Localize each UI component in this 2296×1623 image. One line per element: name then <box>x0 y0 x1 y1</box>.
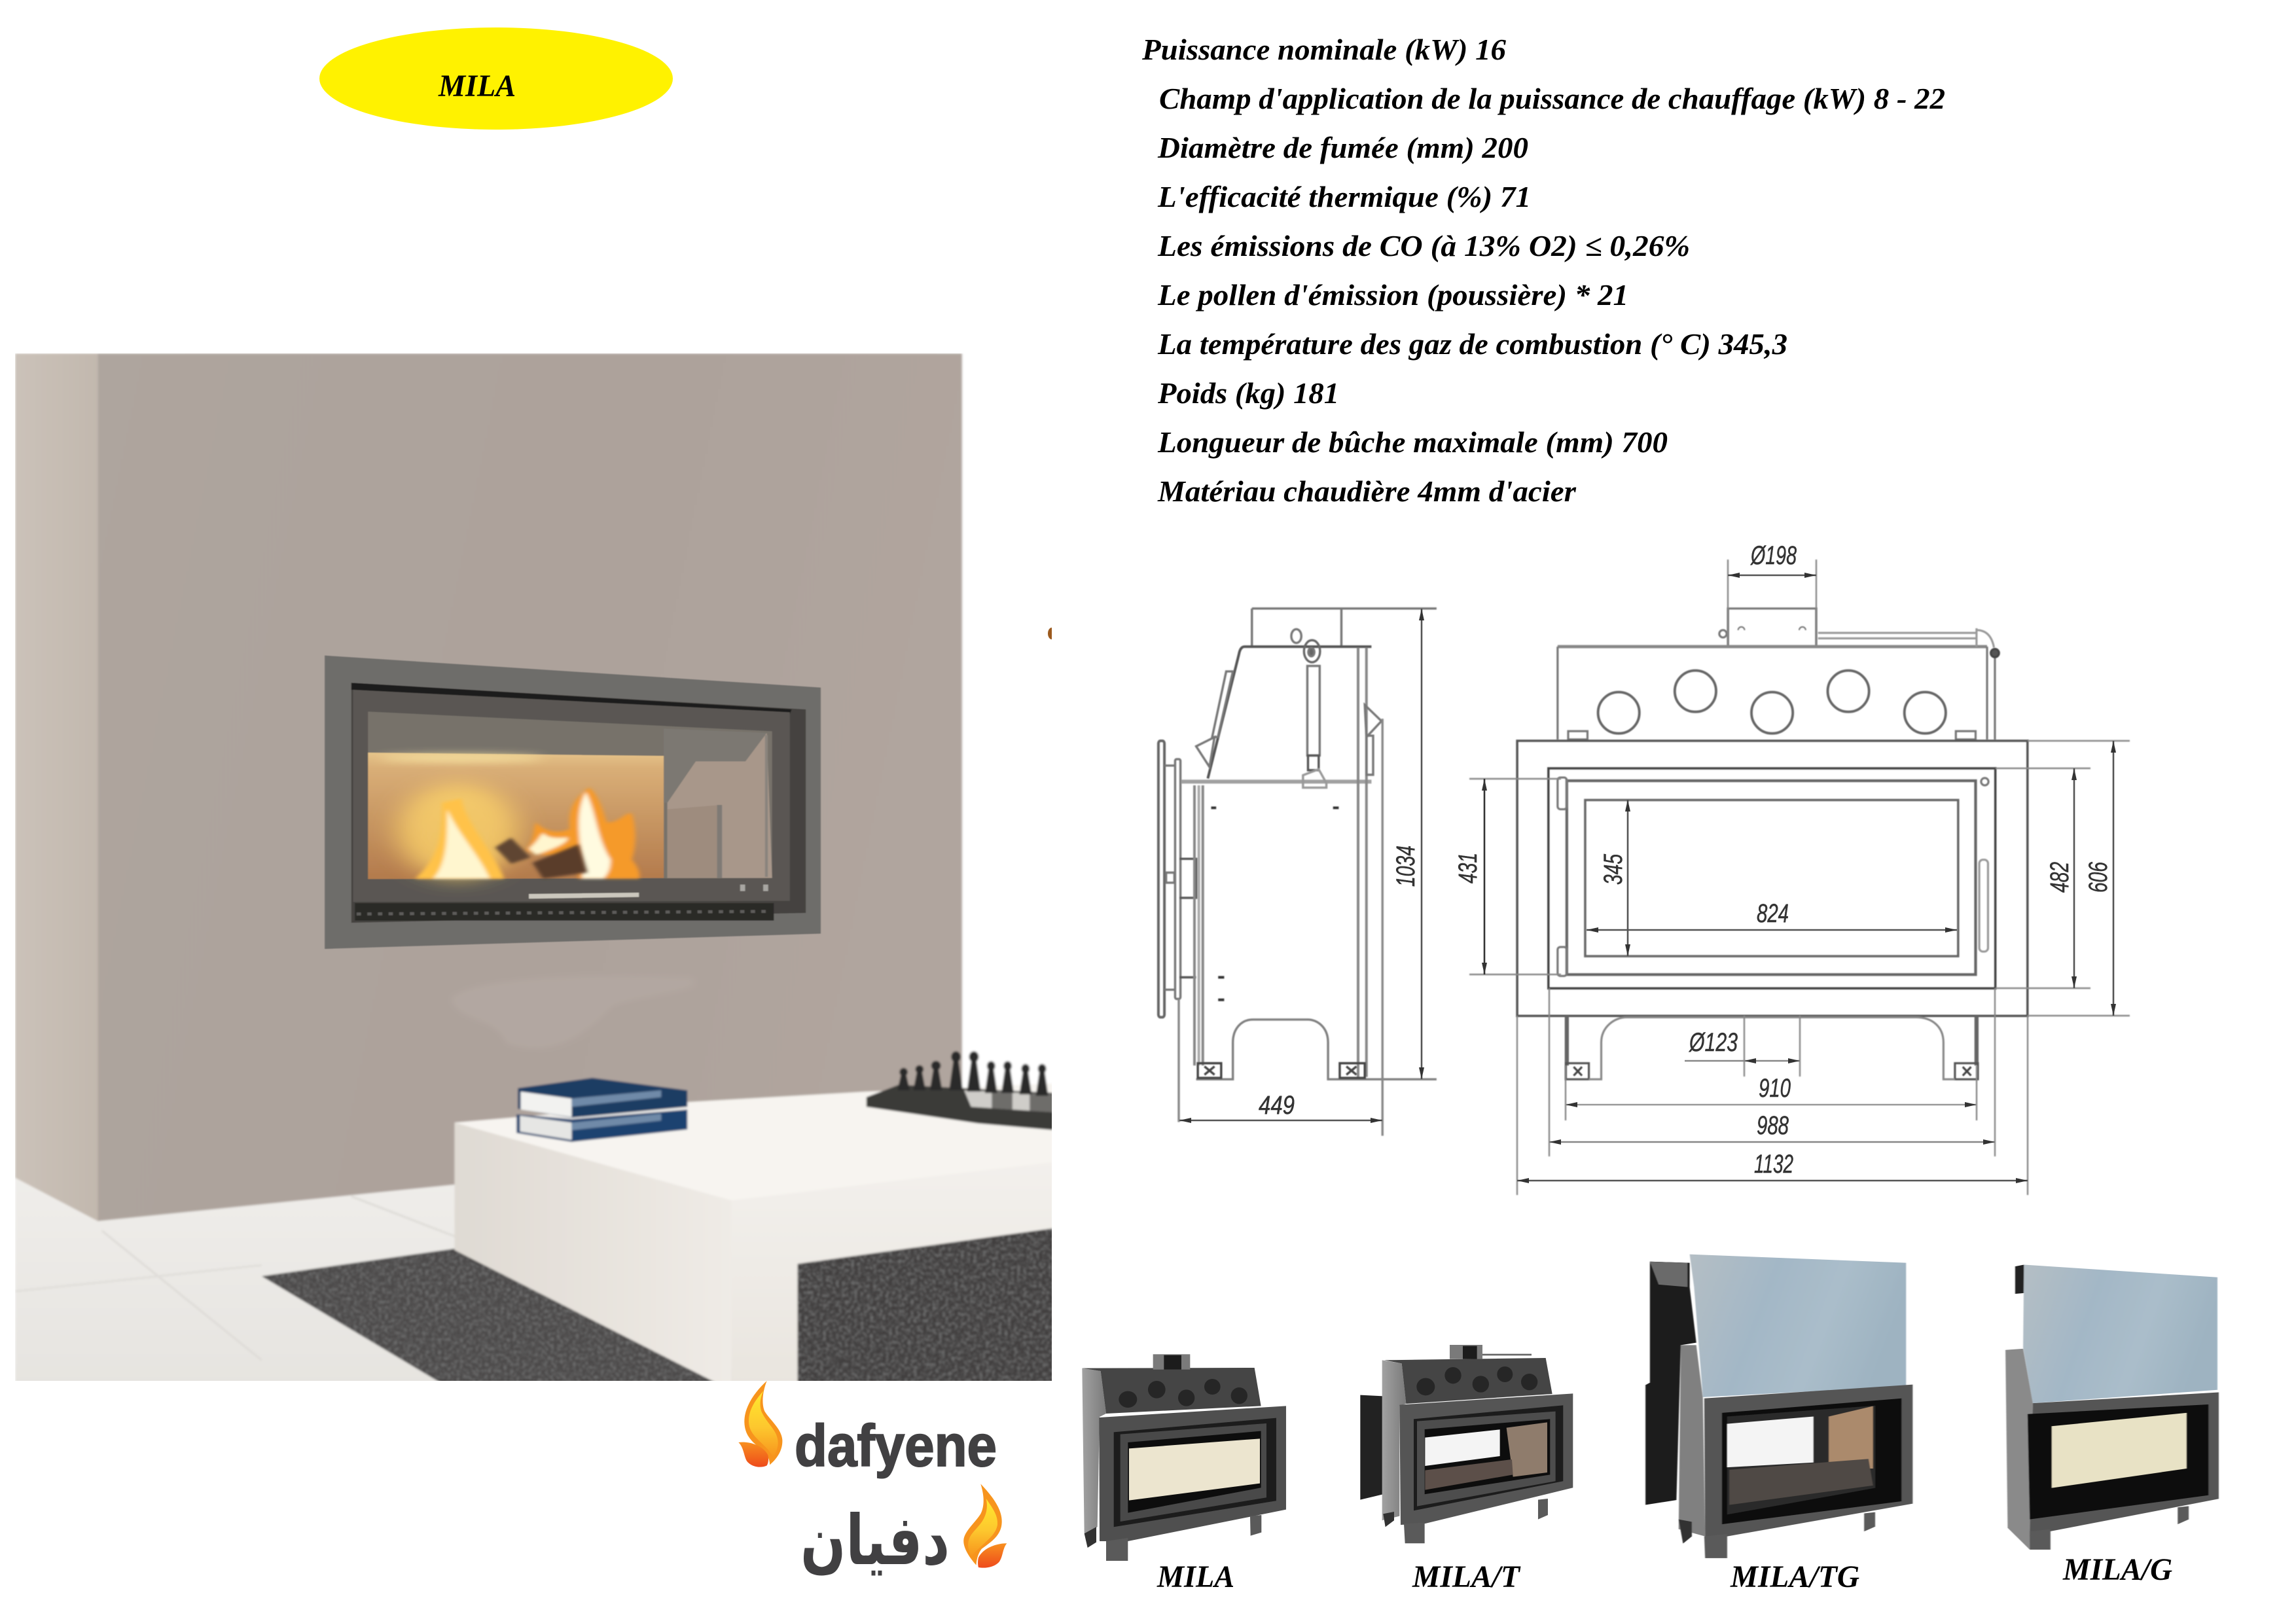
dimension lines and values: 449 <box>1259 1091 1295 1120</box>
rug <box>262 1249 1055 1383</box>
product: MILA/G <box>2005 1265 2219 1587</box>
specifications list: Champ d'application de la puissance de chauffage (kW) 8 - 22 <box>1159 82 1945 115</box>
door handle <box>529 893 639 899</box>
specifications list: Matériau chaudière 4mm d'acier <box>1157 474 1577 508</box>
dimension lines and values: 345 <box>1599 853 1628 885</box>
specifications list: Le pollen d'émission (poussière) * 21 <box>1157 278 1628 312</box>
coffee table <box>455 1083 1055 1383</box>
logo: dafyene latin <box>738 1381 997 1479</box>
dimension lines and values: 1034 <box>1391 846 1420 887</box>
dimension lines and values <box>1179 541 2130 1195</box>
specifications list: Poids (kg) 181 <box>1157 376 1339 410</box>
dimension lines and values: 824 <box>1757 899 1789 928</box>
dimension lines and values: 988 <box>1757 1111 1789 1140</box>
specifications list: Longueur de bûche maximale (mm) 700 <box>1157 425 1668 459</box>
dimension lines and values: Ø123 <box>1688 1028 1738 1057</box>
flames <box>415 787 639 879</box>
specifications list: La température des gaz de combustion (° C) 345,3 <box>1157 327 1787 361</box>
icon: flame <box>738 1381 782 1467</box>
main wall <box>98 353 962 1221</box>
specifications list: Diamètre de fumée (mm) 200 <box>1157 131 1528 164</box>
specifications list: Puissance nominale (kW) 16 <box>1141 33 1506 66</box>
icon: flame <box>963 1484 1007 1568</box>
logs <box>495 838 588 879</box>
logo: arabic: دفيان <box>800 1501 950 1580</box>
specifications list <box>1141 33 1945 508</box>
technical drawing: front view <box>1517 609 2028 1079</box>
stray mark at photo edge <box>1048 628 1052 639</box>
product: MILA <box>1082 1354 1286 1594</box>
label: MILA <box>1157 1560 1234 1594</box>
firebox glass <box>368 711 772 879</box>
dimension lines and values: 910 <box>1759 1074 1791 1103</box>
technical drawing: side view <box>1158 609 1437 1135</box>
dimension lines and values: 482 <box>2045 862 2074 893</box>
books <box>516 1078 687 1142</box>
specifications list: L'efficacité thermique (%) 71 <box>1157 180 1531 213</box>
left wall return <box>15 353 98 1221</box>
panel: fireplace room photo <box>15 353 1055 1383</box>
dimension lines and values: 606 <box>2084 861 2113 893</box>
label: MILA/T <box>1412 1560 1521 1594</box>
label: MILA/G <box>2062 1552 2172 1587</box>
specifications list: Les émissions de CO (à 13% O2) ≤ 0,26% <box>1157 229 1690 262</box>
chess set <box>867 1051 1055 1130</box>
fireplace insert in the photo <box>325 656 821 949</box>
dimension lines and values: 431 <box>1454 853 1482 883</box>
badge: MILA title ellipse <box>319 27 673 130</box>
label: MILA/TG <box>1730 1560 1859 1594</box>
product: MILA/T <box>1360 1345 1573 1594</box>
shadow under coffee table <box>798 1228 1055 1383</box>
dimension lines and values: 1132 <box>1754 1150 1793 1179</box>
logo: dafyene latin: dafyene <box>795 1414 997 1479</box>
dimension lines and values: Ø198 <box>1750 541 1797 570</box>
product: MILA/TG <box>1645 1255 1912 1594</box>
wall patch smudge <box>451 976 694 1048</box>
floor <box>15 1154 1055 1383</box>
title: MILA: MILA <box>438 69 516 103</box>
vent grille <box>355 903 774 921</box>
